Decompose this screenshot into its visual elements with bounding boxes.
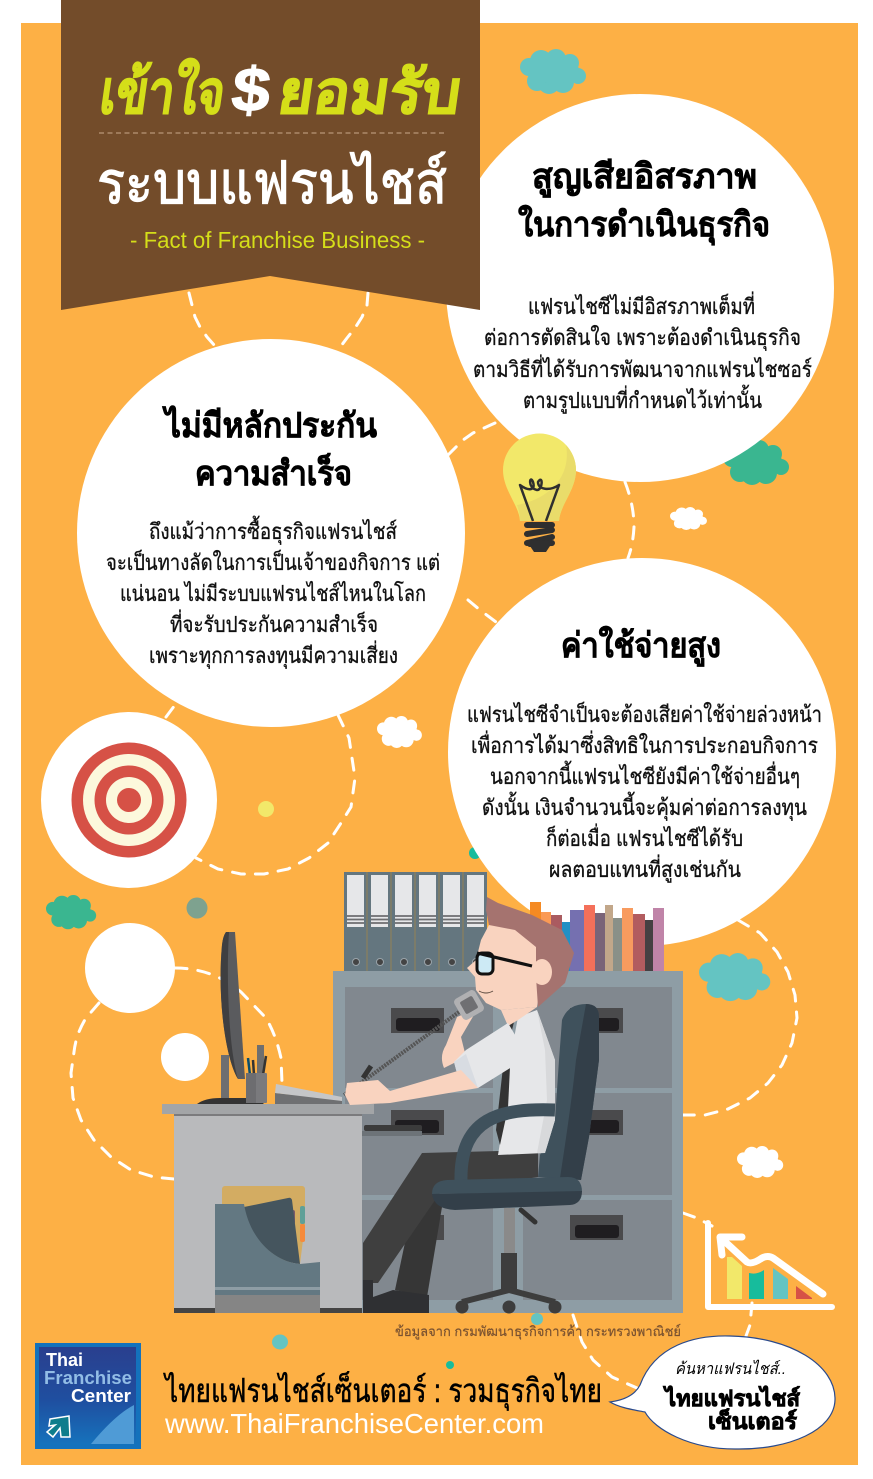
icon: arrow (47, 1416, 70, 1437)
cloud: green left (46, 895, 96, 929)
armrest (461, 1110, 555, 1180)
legs (363, 1150, 538, 1313)
glasses (477, 953, 532, 974)
icon: light bulb (503, 433, 576, 552)
books (530, 902, 664, 972)
body text: ตามรูปแบบที่กำหนดไว้เท่านั้น (523, 385, 762, 414)
body text: แน่นอน ไม่มีระบบแฟรนไชส์ไหนในโลก (120, 581, 426, 606)
logo: Thai Franchise Center: Center (71, 1386, 131, 1406)
panel: no guarantee (77, 339, 465, 727)
cloud: white near bulb (670, 507, 707, 530)
ear (532, 959, 552, 985)
monitor (197, 932, 264, 1104)
desk (162, 1104, 374, 1313)
logo: Thai Franchise Center: Thai (46, 1350, 83, 1370)
cloud: white middle (377, 716, 422, 748)
mouth (479, 991, 493, 993)
footer url: www.ThaiFranchiseCenter.com (164, 1408, 544, 1439)
shirt and tie (496, 1010, 555, 1155)
heading: ไม่มีหลักประกัน (162, 405, 377, 445)
panel: high cost (448, 558, 836, 946)
body text (473, 291, 812, 414)
sleeve cuff (454, 1054, 478, 1088)
heading: ในการดำเนินธุรกิจ (518, 204, 770, 246)
logo: Thai Franchise Center: Franchise (44, 1368, 132, 1388)
chair back (538, 1004, 599, 1180)
body text: ตามวิธีที่ได้รับการพัฒนาจากแฟรนไชซอร์ (473, 354, 812, 382)
subtitle: - Fact of Franchise Business - (130, 227, 425, 253)
body text: ผลตอบแทนที่สูงเช่นกัน (549, 854, 741, 883)
body text: ที่จะรับประกันความสำเร็จ (170, 609, 378, 637)
chair back shade (560, 1004, 599, 1180)
panel: target circle (41, 712, 217, 888)
cloud: white lower right (737, 1146, 783, 1178)
sleeve (454, 1023, 528, 1088)
title line 2: ระบบแฟรนไชส์ (97, 150, 447, 216)
body text: แฟรนไชซีไม่มีอิสรภาพเต็มที่ (528, 291, 755, 319)
speech bubble: เซ็นเตอร์ (708, 1407, 797, 1434)
heading: ค่าใช้จ่ายสูง (561, 625, 721, 667)
title line 1: เข้าใจ (96, 57, 230, 126)
decorative dots (186, 801, 543, 1369)
body text (106, 516, 440, 669)
desk phone (275, 1084, 342, 1104)
logo: Thai Franchise Center (35, 1343, 141, 1449)
speech bubble: ค้นหาแฟรนไชส์.. (675, 1359, 786, 1378)
icon: target (72, 742, 186, 858)
heading (518, 158, 770, 246)
speech bubble (610, 1336, 835, 1449)
heading: สูญเสียอิสรภาพ (532, 158, 757, 198)
icon: declining chart (708, 1223, 832, 1307)
pencil cup (246, 1045, 267, 1103)
cloud: teal top (520, 49, 586, 94)
chair base (456, 1208, 562, 1314)
cloud: green right (723, 440, 789, 485)
handset cord (344, 1012, 459, 1095)
illustration: office scene (162, 872, 683, 1314)
hair (486, 897, 574, 1007)
chair seat (432, 1177, 582, 1210)
body text (467, 700, 822, 883)
pen (363, 1066, 371, 1078)
keyboard (362, 1125, 422, 1136)
arm on desk (345, 1070, 478, 1105)
white circles left (85, 923, 209, 1081)
cloud: teal lower right (699, 953, 770, 1001)
body text: เพราะทุกการลงทุนมีความเสี่ยง (149, 640, 398, 669)
heading (162, 405, 377, 493)
body text: ต่อการตัดสินใจ เพราะต้องดำเนินธุรกิจ (484, 325, 801, 351)
binders (344, 872, 487, 972)
paper tray with folders (215, 1186, 320, 1313)
title line 1 (96, 56, 466, 126)
footer title: ไทยแฟรนไชส์เซ็นเตอร์ : รวมธุรกิจไทย (163, 1371, 602, 1411)
panel: loss of freedom (446, 94, 834, 482)
handset (453, 989, 485, 1021)
body text: ก็ต่อเมื่อ แฟรนไชซีได้รับ (546, 823, 743, 851)
head (467, 897, 574, 1026)
body text: นอกจากนี้แฟรนไชซียังมีค่าใช้จ่ายอื่นๆ (490, 761, 800, 789)
panel: title banner (61, 0, 480, 310)
dashed connector lines (71, 293, 797, 1388)
body text: จะเป็นทางลัดในการเป็นเจ้าของกิจการ แต่ (106, 548, 440, 575)
source credit: ข้อมูลจาก กรมพัฒนาธุรกิจการค้า กระทรวงพาณิชย์ (395, 1323, 681, 1340)
body text: เพื่อการได้มาซึ่งสิทธิในการประกอบกิจการ (471, 730, 818, 758)
title line 1: ยอมรับ (274, 58, 466, 126)
speech bubble: ไทยแฟรนไชส์ (663, 1385, 801, 1411)
body text: ดังนั้น เงินจำนวนนี้จะคุ้มค่าต่อการลงทุน (482, 792, 807, 821)
heading: ความสำเร็จ (195, 452, 352, 493)
body text: ถึงแม้ว่าการซื้อธุรกิจแฟรนไชส์ (149, 516, 397, 545)
filing cabinet (333, 971, 683, 1313)
arm holding handset (442, 1008, 478, 1068)
title line 1: $ (229, 56, 274, 125)
